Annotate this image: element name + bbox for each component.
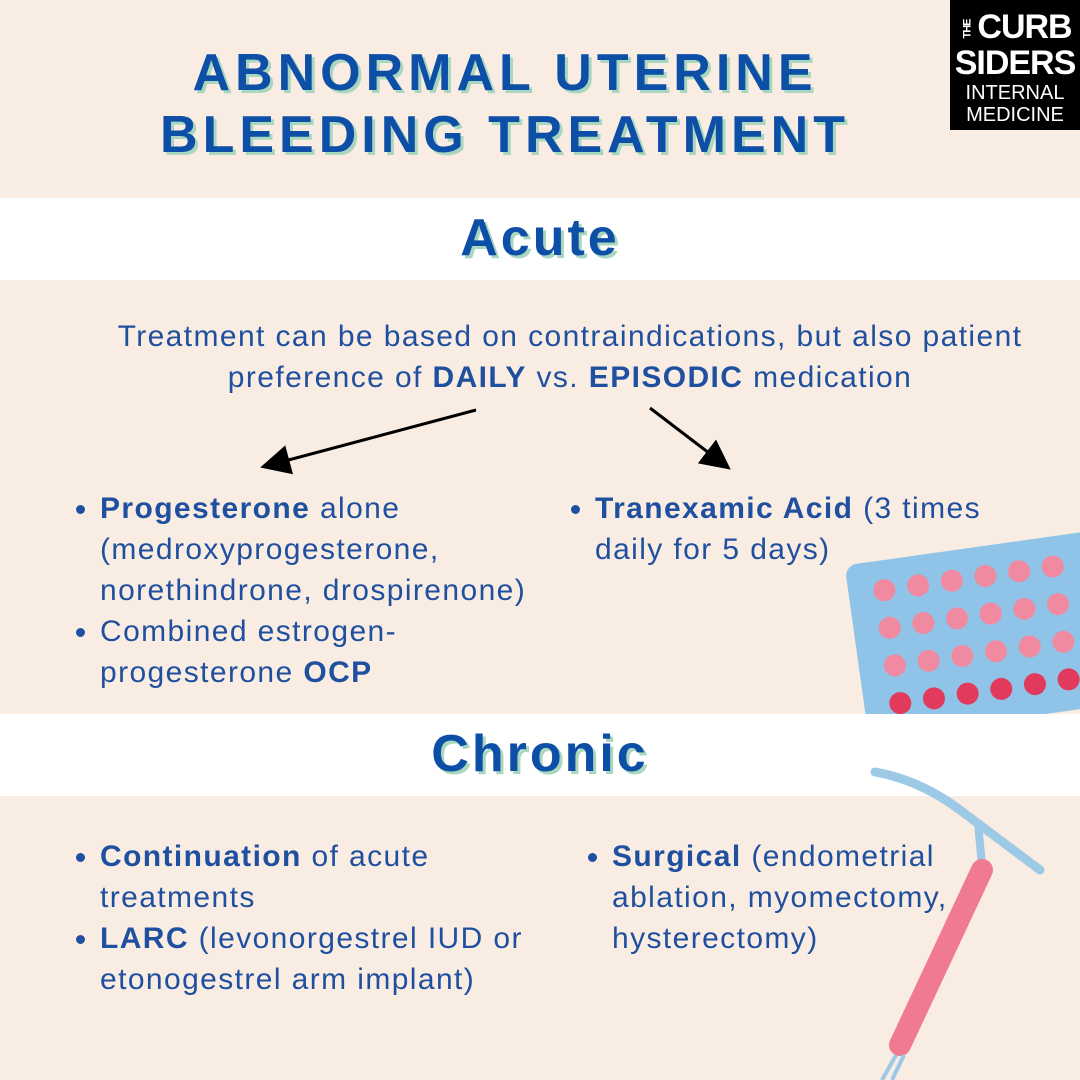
list: acute left: (medroxyprogesterone,: [100, 533, 440, 566]
list: chronic right: ablation, myomectomy,: [612, 881, 948, 914]
list: acute left: [76, 492, 526, 689]
list: chronic left: [76, 840, 523, 996]
icon: IUD: [870, 768, 1044, 1080]
list: chronic left: etonogestrel arm implant): [100, 963, 475, 996]
list: acute right: Tranexamic Acid (3 times: [595, 492, 981, 525]
list: chronic left: LARC (levonorgestrel IUD or: [100, 922, 523, 955]
list: chronic right: Surgical (endometrial: [612, 840, 935, 873]
list: acute left: Progesterone alone: [100, 492, 400, 525]
logo: INTERNAL: [966, 82, 1064, 104]
list: chronic right: hysterectomy): [612, 922, 819, 955]
list: acute left: Combined estrogen-: [100, 615, 397, 648]
title: [160, 44, 850, 164]
logo: MEDICINE: [966, 104, 1064, 126]
list: acute left: progesterone OCP: [100, 656, 373, 689]
list: acute left: norethindrone, drospirenone): [100, 574, 526, 607]
list: acute right: [571, 492, 981, 566]
logo: CURB: [977, 8, 1072, 46]
list: chronic left: treatments: [100, 881, 256, 914]
intro text: Treatment can be based on contraindications, but also patient: [118, 320, 1022, 353]
logo: [950, 0, 1080, 130]
heading: Acute: Acute: [460, 209, 620, 267]
icon: pill pack: [846, 532, 1080, 714]
band: chronic: [0, 714, 1080, 796]
title: BLEEDING TREATMENT: [160, 106, 850, 164]
band: acute: [0, 198, 1080, 280]
intro text: preference of DAILY vs. EPISODIC medication: [228, 361, 912, 394]
list: acute right: daily for 5 days): [595, 533, 831, 566]
list: chronic left: Continuation of acute: [100, 840, 429, 873]
list: chronic right: [588, 840, 948, 955]
logo: THE: [962, 20, 974, 39]
logo: SIDERS: [955, 44, 1075, 82]
intro text: [118, 320, 1022, 394]
heading: Chronic: Chronic: [431, 725, 649, 783]
title: ABNORMAL UTERINE: [192, 44, 818, 102]
